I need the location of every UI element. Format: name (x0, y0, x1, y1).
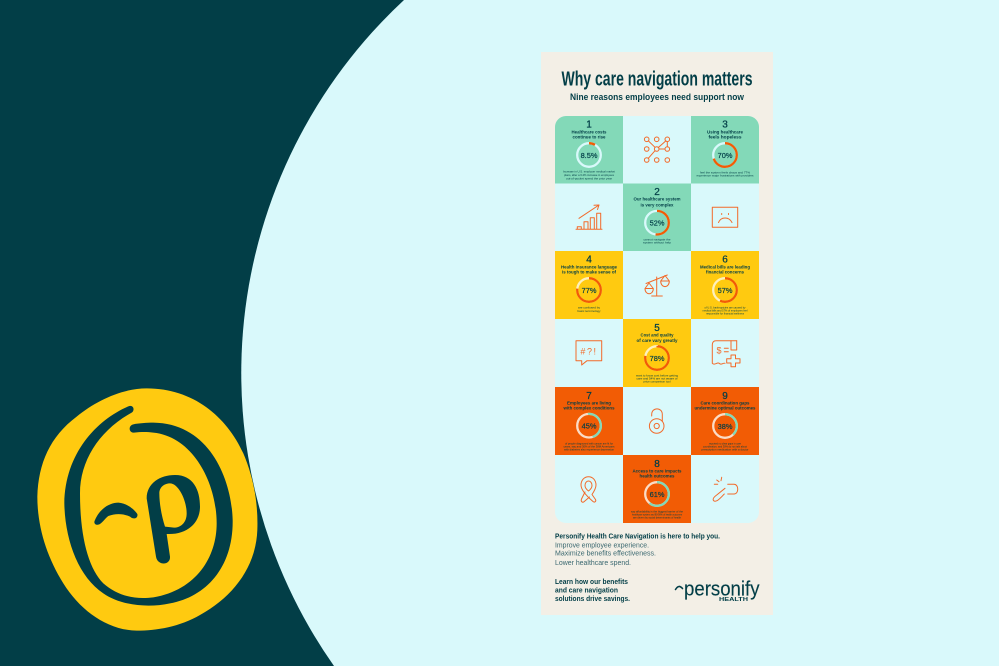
reason 2: complex: 2 (654, 187, 660, 198)
reason 1: costs: Increase in U.S. employer medical market (563, 170, 615, 174)
reason 6: medical bills: 6 (722, 254, 728, 266)
reason 7: complex conditions: Employees are living (567, 400, 611, 406)
reason 9: care coordination gaps: coordination, and 30% do not talk about (703, 444, 747, 448)
reason 4: insurance language: is tough to make sense of (562, 270, 616, 276)
reason 8: access to care: say affordability is the biggest barrier of the (631, 510, 683, 514)
reason 9: care coordination gaps: Care coordination gaps (700, 400, 750, 406)
text block: care navigation benefits: Improve employee experience. (555, 543, 649, 550)
ring 57%: 57% (718, 286, 733, 295)
reason 7: complex conditions: 7 (586, 391, 592, 402)
icon: speech bubble with symbols (576, 341, 602, 365)
icon: balance scales (645, 275, 669, 296)
reason 3: hopeless (696, 120, 754, 178)
reason 6: medical bills: medical bills and 57% of employers feel (702, 308, 748, 312)
reason 2: complex: system without help (643, 241, 671, 245)
panel: infographic card (541, 52, 773, 615)
ring 61%: 61% (650, 490, 665, 499)
reason 3: hopeless: experience major frustrations with providers (696, 174, 754, 178)
text block: call to action: and care navigation (555, 588, 618, 594)
ring 70%: 70% (718, 151, 733, 160)
reason 8: access to care (631, 459, 683, 520)
logo: personify health: HEALTH (719, 597, 748, 603)
reason 5: cost and quality: care and 54% are not aware of (636, 377, 678, 381)
reason 7: complex conditions: of people diagnosed with cancer are fit for (565, 441, 613, 445)
panel: reasons grid (555, 116, 759, 523)
text block: care navigation benefits: Maximize benefits effectiveness. (555, 551, 656, 558)
text block: care navigation benefits (555, 534, 720, 567)
reason 5: cost and quality: Cost and quality (640, 332, 674, 338)
reason 4: insurance language: Health insurance language (561, 264, 617, 270)
reason 5: cost and quality: 5 (654, 323, 660, 334)
subtitle: Nine reasons employees need support now (570, 92, 745, 103)
text block: care navigation benefits: Lower healthcare spend. (555, 560, 631, 567)
reason 8: access to care: Access to care impacts (632, 468, 682, 474)
reason 8: access to care: 8 (654, 459, 660, 470)
reason 2: complex: is very complex (640, 202, 674, 208)
reason 6: medical bills: financial concerns (706, 270, 744, 276)
reason 7: complex conditions: years, say and 30% of the 38M Americans (564, 445, 615, 449)
icon: medical bill receipt with cross (712, 341, 740, 367)
reason 9: care coordination gaps: undermine optimal outcomes (694, 405, 756, 411)
reason 1: costs: 1 (586, 120, 592, 130)
reason 3: hopeless: 3 (722, 120, 728, 130)
reason 9: care coordination gaps (694, 391, 756, 451)
icon: awareness ribbon (581, 477, 596, 502)
ring 38%: 38% (718, 422, 733, 431)
reason 5: cost and quality (636, 323, 678, 384)
text block: call to action (555, 579, 630, 603)
icon: open padlock (649, 409, 664, 433)
ring 8.5%: 8.5% (581, 151, 598, 160)
reason 2: complex (634, 187, 680, 245)
reason 3: hopeless: feels hopeless (708, 134, 742, 140)
reason 2: complex: cannot navigate the (644, 237, 671, 241)
icon: personify yellow badge (37, 388, 257, 631)
reason 1: costs: continue to rise (572, 134, 606, 140)
reason 8: access to care: health outcomes (640, 473, 675, 479)
icon: sad face screen (712, 207, 738, 227)
icon: speech bubble with symbols: #?! (580, 346, 598, 356)
reason 5: cost and quality: of care vary greatly (636, 338, 678, 344)
ring 45%: 45% (582, 422, 597, 430)
text block: call to action: solutions drive savings. (555, 596, 630, 603)
reason 6: medical bills (700, 254, 750, 315)
reason 9: care coordination gaps: prescription medication with a doctor (702, 447, 748, 451)
reason 7: complex conditions: with complex conditions (563, 405, 615, 411)
title: Why care navigation matters (562, 68, 752, 90)
ring 77%: 77% (582, 286, 597, 295)
reason 6: medical bills: Medical bills are leading (700, 264, 750, 270)
reason 4: insurance language: are confused by (578, 306, 601, 310)
reason 9: care coordination gaps: reported no clear gaps in care (709, 441, 741, 445)
icon: medical bill receipt with cross: $ (716, 346, 722, 356)
reason 3: hopeless: Using healthcare (707, 129, 743, 135)
reason 7: complex conditions (563, 391, 615, 452)
icon: rising bar chart (576, 205, 602, 229)
text block: care navigation benefits: Personify Health Care Navigation is here to help you. (555, 534, 720, 541)
reason 3: hopeless: feel the system feels chaos and 77% (700, 170, 750, 174)
reason 1: costs: Healthcare costs (572, 129, 607, 135)
reason 6: medical bills: responsible for financial wellness (706, 311, 744, 315)
reason 4: insurance language (561, 254, 617, 313)
reason 4: insurance language: 4 (586, 254, 592, 266)
icon: network (644, 137, 670, 162)
reason 5: cost and quality: price comparison tool (644, 380, 671, 384)
logo: personify health: personify (684, 578, 760, 600)
icon: broken chain link (713, 477, 738, 501)
reason 5: cost and quality: want to know cost before getting (636, 374, 678, 378)
reason 8: access to care: healthcare system and 80-90% of health outcomes (632, 513, 682, 517)
reason 1: costs: plans, after a 6.4% increase in employees (564, 173, 614, 177)
reason 8: access to care: are driven by social determinants of health (633, 516, 681, 520)
reason 6: medical bills: of U.S. bankruptcies are caused by (704, 305, 746, 309)
reason 4: insurance language: basic terminology (578, 309, 601, 313)
reason 1: costs (563, 120, 615, 180)
text block: call to action: Learn how our benefits (555, 579, 628, 586)
ring 52%: 52% (650, 218, 665, 228)
reason 9: care coordination gaps: 9 (722, 391, 728, 402)
background: light blue curved area (241, 0, 999, 666)
reason 2: complex: Our healthcare system (634, 197, 680, 203)
ring 78%: 78% (650, 354, 665, 363)
reason 7: complex conditions: with diabetes also experience depression (564, 448, 614, 452)
reason 1: costs: out-of-pocket spend the prior year (566, 176, 612, 180)
